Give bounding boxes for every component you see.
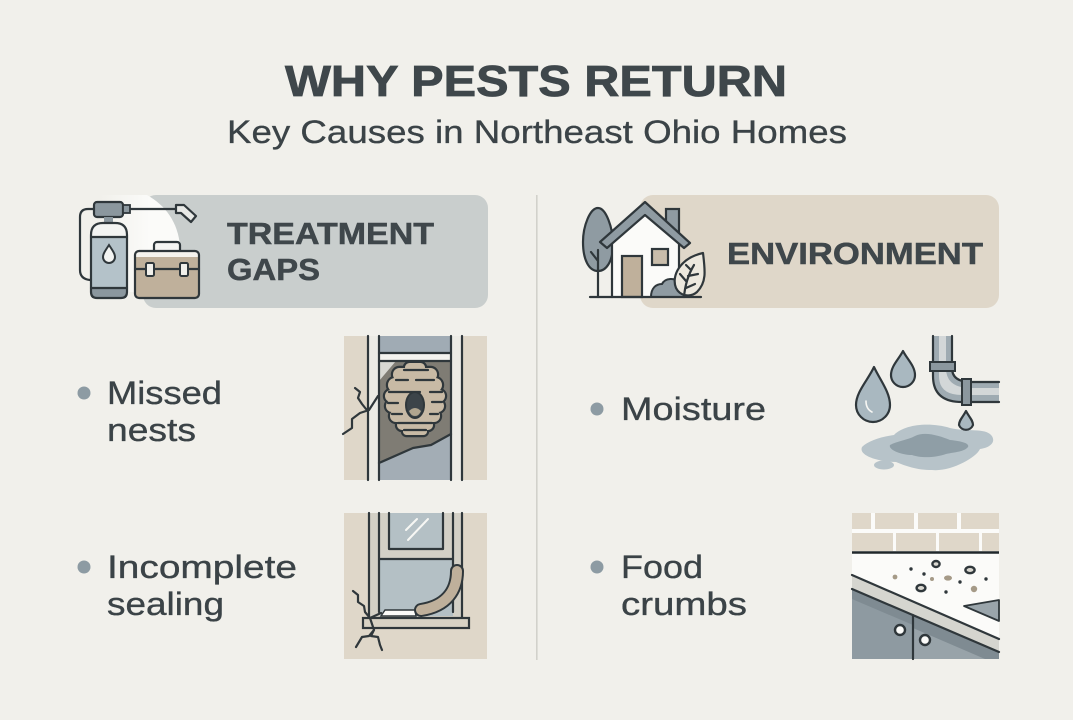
subtitle: Key Causes in Northeast Ohio Homes — [227, 114, 847, 150]
label: food crumbs: crumbs — [621, 586, 747, 622]
label: missed nests: nests — [107, 412, 196, 448]
caulk bead — [421, 571, 457, 610]
label: incomplete sealing: Incomplete — [107, 549, 297, 585]
crack in sill — [353, 591, 382, 650]
bullet — [590, 560, 604, 574]
panel: environment header — [583, 195, 999, 308]
pipe — [933, 336, 999, 402]
bullet — [78, 386, 90, 400]
list item: incomplete sealing — [78, 549, 297, 622]
heading: treatment gaps: TREATMENT — [227, 216, 434, 251]
crumbs — [909, 567, 988, 594]
label: moisture: Moisture — [621, 391, 766, 427]
heading: environment: ENVIRONMENT — [727, 236, 983, 271]
counter and cabinets — [852, 575, 999, 659]
illustration: window with incomplete caulk — [344, 513, 487, 659]
label: food crumbs — [621, 549, 747, 622]
panel: treatment gaps header — [80, 195, 488, 308]
icon: beehive nest — [385, 363, 445, 435]
heading: treatment gaps: GAPS — [227, 252, 320, 287]
label: food crumbs: Food — [621, 549, 703, 585]
label: missed nests — [107, 375, 222, 448]
bullet — [590, 402, 604, 416]
icon: toolbox — [135, 242, 199, 298]
list item: moisture — [590, 391, 766, 427]
label: incomplete sealing — [107, 549, 297, 622]
illustration: crumbs on kitchen counter — [852, 513, 999, 659]
illustration: hidden nest in wall cavity — [343, 336, 487, 480]
water drops — [856, 367, 890, 422]
title: WHY PESTS RETURN — [285, 57, 787, 106]
crack in wall — [343, 388, 378, 434]
label: missed nests: Missed — [107, 375, 222, 411]
puddle — [862, 425, 993, 470]
icon: house with tree and leaf — [583, 202, 705, 297]
illustration: leaking pipe and puddle — [856, 336, 999, 470]
list item: food crumbs — [590, 549, 747, 622]
sink — [964, 600, 999, 621]
label: incomplete sealing: sealing — [107, 586, 224, 622]
heading: treatment gaps — [227, 216, 434, 287]
list item: missed nests — [78, 375, 222, 448]
bullet — [78, 560, 90, 574]
icon: pump sprayer — [80, 202, 196, 298]
backsplash tiles — [852, 513, 999, 551]
